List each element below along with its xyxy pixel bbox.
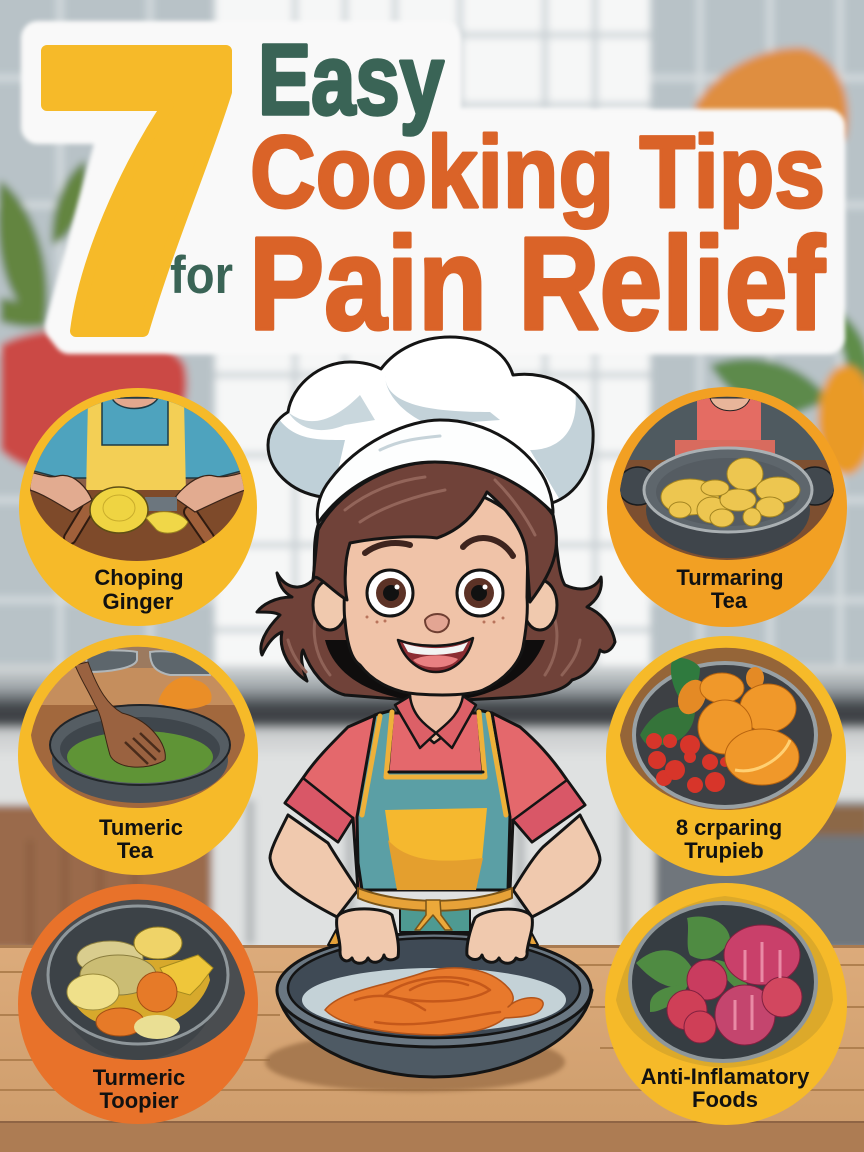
shirt cuffs — [285, 778, 585, 842]
heading word: for: for — [170, 246, 233, 305]
shirt — [285, 713, 585, 890]
ears — [313, 580, 347, 630]
apron waist tie — [358, 888, 512, 911]
apron pocket — [385, 808, 487, 890]
pan shadow — [265, 1032, 565, 1092]
tie ends — [328, 930, 538, 945]
nose — [425, 614, 449, 632]
blurred tomato — [0, 328, 187, 476]
circle: chopping ginger — [19, 388, 260, 626]
hair highlights — [345, 477, 535, 535]
heading word: Easy: Easy — [258, 24, 444, 136]
circle: turmeric topping — [18, 884, 260, 1124]
big numeral 7 — [47, 51, 226, 331]
label: Turmaring — [676, 565, 784, 590]
label: Anti-Inflamatory — [641, 1064, 810, 1089]
hands — [30, 472, 92, 512]
circle: anti-inflammatory foods — [605, 883, 847, 1125]
circle: turmaring tea — [607, 387, 850, 627]
freckles — [366, 616, 504, 624]
label: Choping — [94, 565, 184, 590]
label: 8 crparing — [676, 815, 782, 840]
wooden counter — [0, 945, 864, 1152]
label: Tea — [117, 838, 154, 863]
circle: preparing food — [606, 636, 850, 876]
face — [344, 488, 528, 695]
label: Toopier — [99, 1088, 179, 1113]
teal lower apron — [400, 905, 470, 932]
blurred orange top right — [695, 48, 848, 140]
leaves — [636, 917, 752, 1012]
tomatoes — [667, 925, 802, 1045]
label: Ginger — [103, 589, 174, 614]
label: Foods — [692, 1087, 758, 1112]
under hair shadow — [325, 640, 545, 702]
chef hat — [265, 337, 600, 523]
label: Tumeric — [99, 815, 183, 840]
label: Turmeric — [93, 1065, 185, 1090]
salmon fillet — [325, 968, 543, 1035]
neck — [410, 680, 463, 743]
hands — [337, 909, 532, 963]
arms — [270, 815, 600, 917]
fringe — [313, 462, 556, 602]
circle: tumeric tea — [18, 635, 260, 875]
collar — [395, 696, 476, 748]
blurred leaves left — [0, 160, 87, 327]
eyes — [367, 570, 413, 616]
blurred vegetables right — [710, 358, 830, 420]
brows — [365, 538, 513, 556]
chef girl character — [257, 337, 615, 1092]
apron — [357, 710, 510, 890]
title white halo — [38, 38, 828, 337]
label: Trupieb — [684, 838, 764, 863]
knife handles — [70, 505, 208, 538]
title block — [38, 24, 828, 357]
plate shadow — [616, 896, 833, 1068]
frying pan — [277, 933, 592, 1077]
label: Tea — [711, 588, 748, 613]
smile — [398, 638, 473, 672]
hair back — [257, 515, 615, 700]
apron yellow trim — [362, 712, 506, 815]
